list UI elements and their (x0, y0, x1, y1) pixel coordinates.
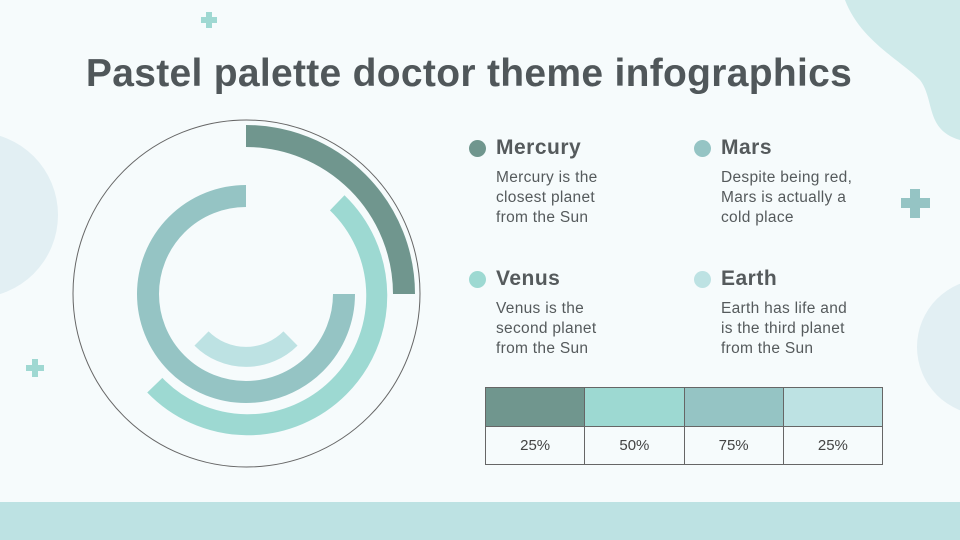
legend: Mars (694, 136, 852, 226)
percentage table: 25% (818, 437, 848, 454)
percentage table: 75% (719, 437, 749, 454)
legend: Mercury (469, 136, 598, 226)
percentage table: 25% (520, 437, 550, 454)
title: Pastel palette doctor theme infographics (86, 52, 852, 95)
legend: Mars: Mars (721, 136, 772, 159)
legend: Mercury: Mercury is the closest planet from the Sun (496, 169, 598, 226)
legend: Earth: Earth has life and is the third planet from the Sun (721, 300, 847, 357)
legend: Mercury: Mercury (496, 136, 581, 159)
legend: Venus: Venus is the second planet from the Sun (496, 300, 596, 357)
percentage table: 50% (619, 437, 649, 454)
legend: Earth: Earth (721, 267, 777, 290)
legend: Venus: Venus (496, 267, 560, 290)
percentage table (485, 387, 883, 465)
radial chart (72, 120, 420, 468)
legend: Venus (469, 267, 596, 357)
legend: Mars: Despite being red, Mars is actually a cold place (721, 169, 852, 226)
legend: Earth (694, 267, 847, 357)
bottom band (0, 502, 960, 540)
